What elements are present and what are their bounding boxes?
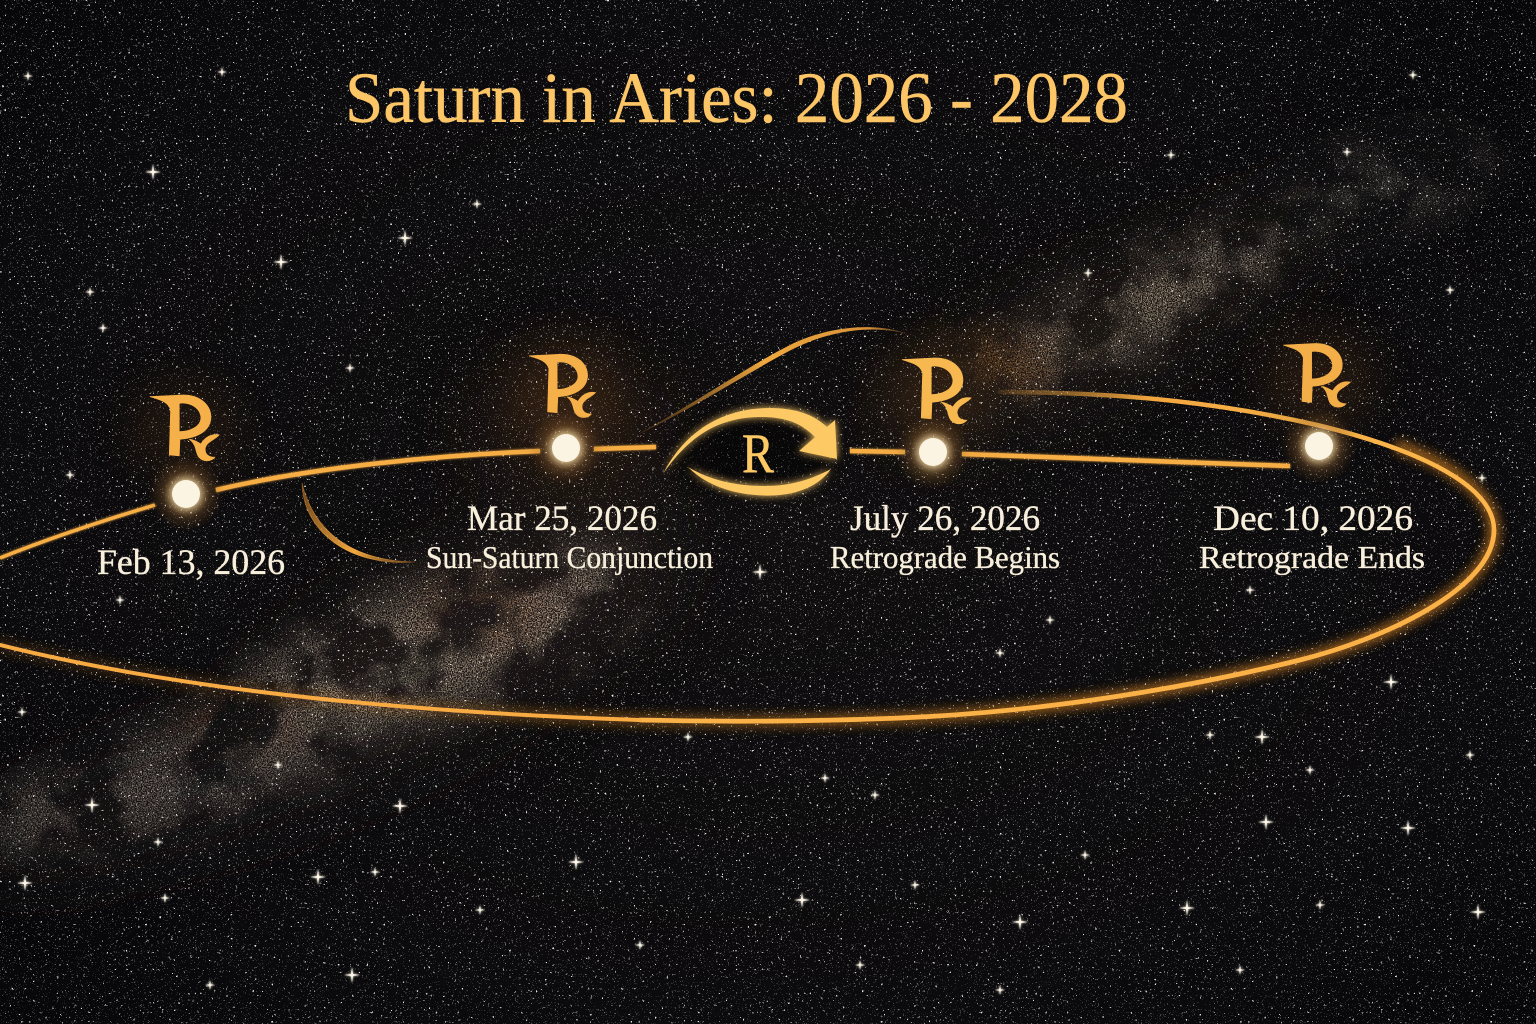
node: star marker 4 <box>1281 408 1357 484</box>
orbit path: large ellipse <box>0 392 1494 721</box>
event label 4: Retrograde Ends <box>1199 539 1425 575</box>
date label 3: July 26, 2026 <box>850 498 1040 538</box>
milestone 1: Feb 13, 2026 <box>97 380 285 582</box>
icon: Saturn glyph 3 <box>880 342 990 442</box>
arrow: retrograde loop <box>663 408 837 496</box>
milestone 4: Dec 10, 2026 <box>1199 330 1425 575</box>
node: star marker 3 <box>895 414 971 490</box>
node: star marker 2 <box>528 410 604 486</box>
event label 2: Sun-Saturn Conjunction <box>426 539 713 575</box>
icon: Saturn glyph 1 <box>130 380 240 480</box>
orbit path: lower-left swoosh <box>302 483 415 562</box>
event label 3: Retrograde Begins <box>830 539 1060 575</box>
orbit path: timeline segments <box>0 447 1290 558</box>
node: star marker 1 <box>148 456 224 532</box>
title: Saturn in Aries: 2026 - 2028 <box>345 58 1128 138</box>
background: Milky Way band <box>0 119 1504 915</box>
orbit path: upper swoosh <box>633 327 910 437</box>
icon: Saturn glyph 4 <box>1263 330 1373 430</box>
icon: Saturn glyph 2 <box>510 340 620 440</box>
retrograde letter R: R <box>742 423 775 485</box>
milestone 3: July 26, 2026 <box>830 342 1060 575</box>
retrograde symbol <box>663 407 837 497</box>
date label 1: Feb 13, 2026 <box>97 542 285 582</box>
milestone 2: Mar 25, 2026 <box>426 340 713 575</box>
date label 2: Mar 25, 2026 <box>467 498 657 538</box>
date label 4: Dec 10, 2026 <box>1213 498 1413 538</box>
